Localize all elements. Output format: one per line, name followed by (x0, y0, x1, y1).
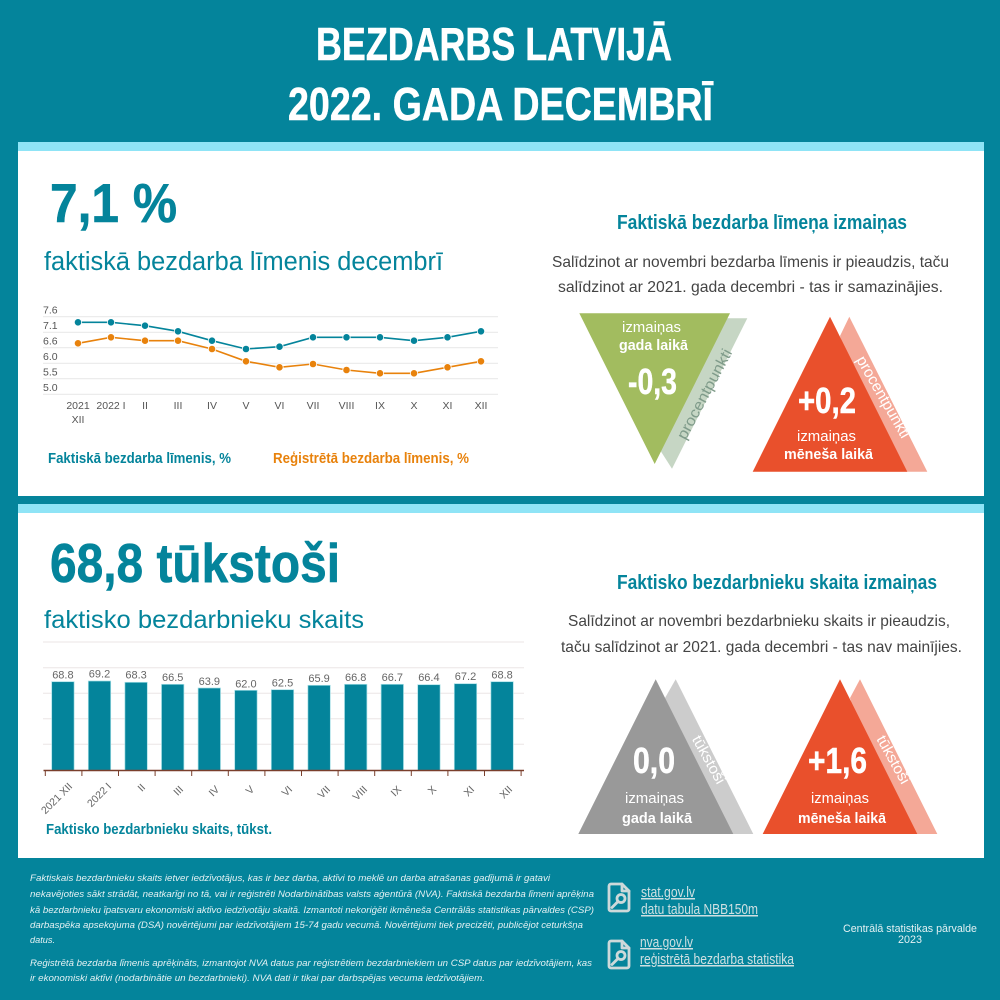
heading: count change: Faktisko bezdarbnieku skaita izmaiņas (617, 572, 937, 594)
line chart: unemployment rates: III (174, 400, 182, 412)
line chart: unemployment rates: X (410, 400, 418, 412)
text block: rate change: Salīdzinot ar novembri bezdarba līmenis ir pieaudzis, taču (552, 254, 949, 271)
legend: registered rate: Reģistrētā bezdarba līmenis, % (273, 451, 469, 467)
bar chart: unemployed count: 63.9 (199, 676, 220, 688)
bar chart: unemployed count: III (171, 784, 186, 798)
text block: count change: Salīdzinot ar novembri bezdarbnieku skaits ir pieaudzis, (568, 613, 950, 630)
line chart: unemployment rates: II (142, 400, 148, 412)
triangle: yearly rate change: procentpunkti (674, 346, 736, 443)
triangle: monthly rate change: mēneša laikā (784, 447, 874, 463)
bar chart: unemployed count: 65.9 (308, 673, 330, 685)
line chart: unemployment rates: 2021 (66, 400, 90, 412)
bar chart: unemployed count: 69.2 (89, 668, 110, 680)
credit: Centrālā statistikas pārvalde (843, 923, 977, 935)
title: BEZDARBS LATVIJĀ (316, 18, 672, 70)
bar chart: unemployed count: 66.4 (418, 672, 440, 684)
footnote text: Reģistrētā bezdarba līmenis aprēķināts, izmantojot NVA datus par reģistrētiem bezdarbniekiem un CSP datus par iedzīvotājiem, kas (30, 958, 592, 969)
panel: unemployed count (18, 504, 984, 858)
heading: rate change: Faktiskā bezdarba līmeņa izmaiņas (617, 212, 907, 234)
subheading: count: faktisko bezdarbnieku skaits (44, 606, 364, 634)
footnote text: kā bezdarbnieku īpatsvaru ekonomiski aktīvo iedzīvotāju skaitā. Izmantoti nekoriģēti ikmēneša Centrālās statistikas pārvaldes (CSP) (30, 905, 594, 916)
footnote text: nekavējoties sākt strādāt, neatkarīgi no tā, vai ir reģistrēti Nodarbinātības valsts aģentūrā (NVA). Faktiskā bezdarba līmeni aprēķina (30, 889, 594, 900)
triangle: monthly count change (763, 679, 937, 834)
line chart: unemployment rates: IV (207, 400, 217, 412)
link: stat.gov.lv: datu tabula NBB150m (641, 901, 758, 918)
link: nva.gov.lv: reģistrētā bezdarba statistika (640, 951, 795, 968)
bar chart: unemployed count: 68.8 (491, 670, 513, 682)
bar chart: unemployed count: II (136, 782, 148, 794)
bar chart: unemployed count: IX (389, 784, 404, 799)
triangle: yearly count change: izmaiņas (625, 791, 684, 807)
credit: 2023 (898, 934, 922, 946)
bar chart: unemployed count: IV (207, 784, 222, 799)
bar chart: unemployed count: 68.8 (52, 670, 74, 682)
bar chart: unemployed count: 66.8 (345, 672, 366, 684)
triangle: yearly rate change: gada laikā (619, 338, 689, 354)
bar chart: unemployed count: XI (462, 784, 477, 799)
text block: count change: taču salīdzinot ar 2021. gada decembri - tas nav mainījies. (561, 639, 962, 656)
legend: actual rate: Faktiskā bezdarba līmenis, % (48, 451, 231, 467)
icon: document search (nva.gov.lv) (609, 941, 629, 968)
triangle: monthly count change: izmaiņas (811, 791, 869, 807)
triangle: monthly rate change: procentpunkti (853, 353, 913, 441)
line chart: unemployment rates: VI (275, 400, 284, 412)
chart caption: Faktisko bezdarbnieku skaits, tūkst. (46, 822, 272, 838)
text block: count change (561, 613, 962, 656)
line chart: unemployment rates: XI (443, 400, 452, 412)
icon: document search (stat.gov.lv) (609, 884, 629, 911)
line chart: unemployment rates: V (242, 400, 250, 412)
footnote text: ir ekonomiski aktīvi (nodarbinātie un bezdarbnieki). NVA dati ir tikai par darbspējas vecuma iedzīvotājiem. (30, 973, 485, 984)
bar chart: unemployed count: 62.0 (235, 678, 257, 690)
bar chart: unemployed count: V (244, 784, 257, 797)
text block: rate change (552, 254, 949, 296)
link: stat.gov.lv (641, 884, 758, 918)
bar chart: unemployed count: 62.5 (272, 678, 293, 690)
line chart: unemployment rates (43, 304, 498, 426)
bar chart: unemployed count: 2022 I (85, 781, 114, 810)
title (288, 18, 714, 130)
triangle: yearly count change: 0,0 (633, 740, 675, 781)
bar chart: unemployed count: VIII (350, 784, 370, 803)
link: stat.gov.lv: stat.gov.lv (641, 884, 695, 901)
bar chart: unemployed count: 67.2 (455, 671, 476, 683)
line chart: unemployment rates: 6.0 (43, 351, 58, 363)
triangle: yearly rate change: izmaiņas (622, 320, 681, 336)
triangle: yearly rate change: -0,3 (628, 361, 677, 402)
line chart: unemployment rates: 5.5 (43, 366, 58, 378)
triangle: yearly count change: gada laikā (622, 811, 693, 827)
bar chart: unemployed count: X (426, 784, 439, 797)
big number: count: 68,8 tūkstoši (50, 532, 340, 594)
bar chart: unemployed count: XII (498, 784, 515, 801)
line chart: unemployment rates: 7.6 (43, 304, 58, 316)
line chart: unemployment rates: 2022 I (96, 400, 126, 412)
triangle: monthly rate change (753, 317, 927, 472)
line chart: unemployment rates: IX (375, 400, 385, 412)
line chart: unemployment rates: VIII (339, 400, 354, 412)
triangle: monthly count change: +1,6 (808, 740, 867, 781)
bar chart: unemployed count: VII (316, 784, 333, 801)
triangle: monthly count change: tūkstoši (873, 733, 913, 787)
bar chart: unemployed count: VI (280, 784, 295, 799)
triangle: yearly count change: tūkstoši (688, 733, 729, 787)
line chart: unemployment rates: 7.1 (43, 320, 58, 332)
bar chart: unemployed count: 66.5 (162, 672, 183, 684)
link: nva.gov.lv: nva.gov.lv (640, 934, 693, 951)
triangle: monthly count change: mēneša laikā (798, 811, 887, 827)
footnote text: datus. (30, 935, 55, 946)
triangle: yearly count change (578, 679, 753, 834)
triangle: yearly rate change (579, 313, 747, 469)
footnote text (30, 873, 594, 984)
bar chart: unemployed count: 66.7 (382, 672, 403, 684)
line chart: unemployment rates: XII (475, 400, 487, 412)
bar chart: unemployed count: 2021 XII (39, 781, 75, 817)
footnote text: Faktiskais bezdarbnieku skaits ietver iedzīvotājus, kas ir bez darba, aktīvi to meklē un darba atrašanas gadījumā ir gatavi (30, 873, 551, 884)
big number: rate: 7,1 % (50, 172, 177, 234)
title: 2022. GADA DECEMBRĪ (288, 78, 714, 130)
credit (843, 923, 977, 946)
footnote text: darbaspēka apsekojuma (DSA) novērtējumi par iedzīvotājiem 15-74 gadu vecumā. Novērtējumi tiek precizēti, publicējot ceturkšņa (30, 920, 583, 931)
triangle: monthly rate change: izmaiņas (797, 429, 856, 445)
triangle: monthly rate change: +0,2 (798, 380, 856, 421)
bar chart: unemployed count (39, 642, 524, 817)
link: nva.gov.lv (640, 934, 795, 968)
line chart: unemployment rates: XII (72, 414, 84, 426)
line chart: unemployment rates: VII (307, 400, 319, 412)
subheading: rate: faktiskā bezdarba līmenis decembrī (44, 248, 443, 276)
bar chart: unemployed count: 68.3 (125, 670, 147, 682)
panel: unemployment rate (18, 142, 984, 496)
line chart: unemployment rates: 5.0 (43, 382, 58, 394)
line chart: unemployment rates: 6.6 (43, 336, 58, 348)
text block: rate change: salīdzinot ar 2021. gada decembri - tas ir samazinājies. (558, 279, 943, 296)
